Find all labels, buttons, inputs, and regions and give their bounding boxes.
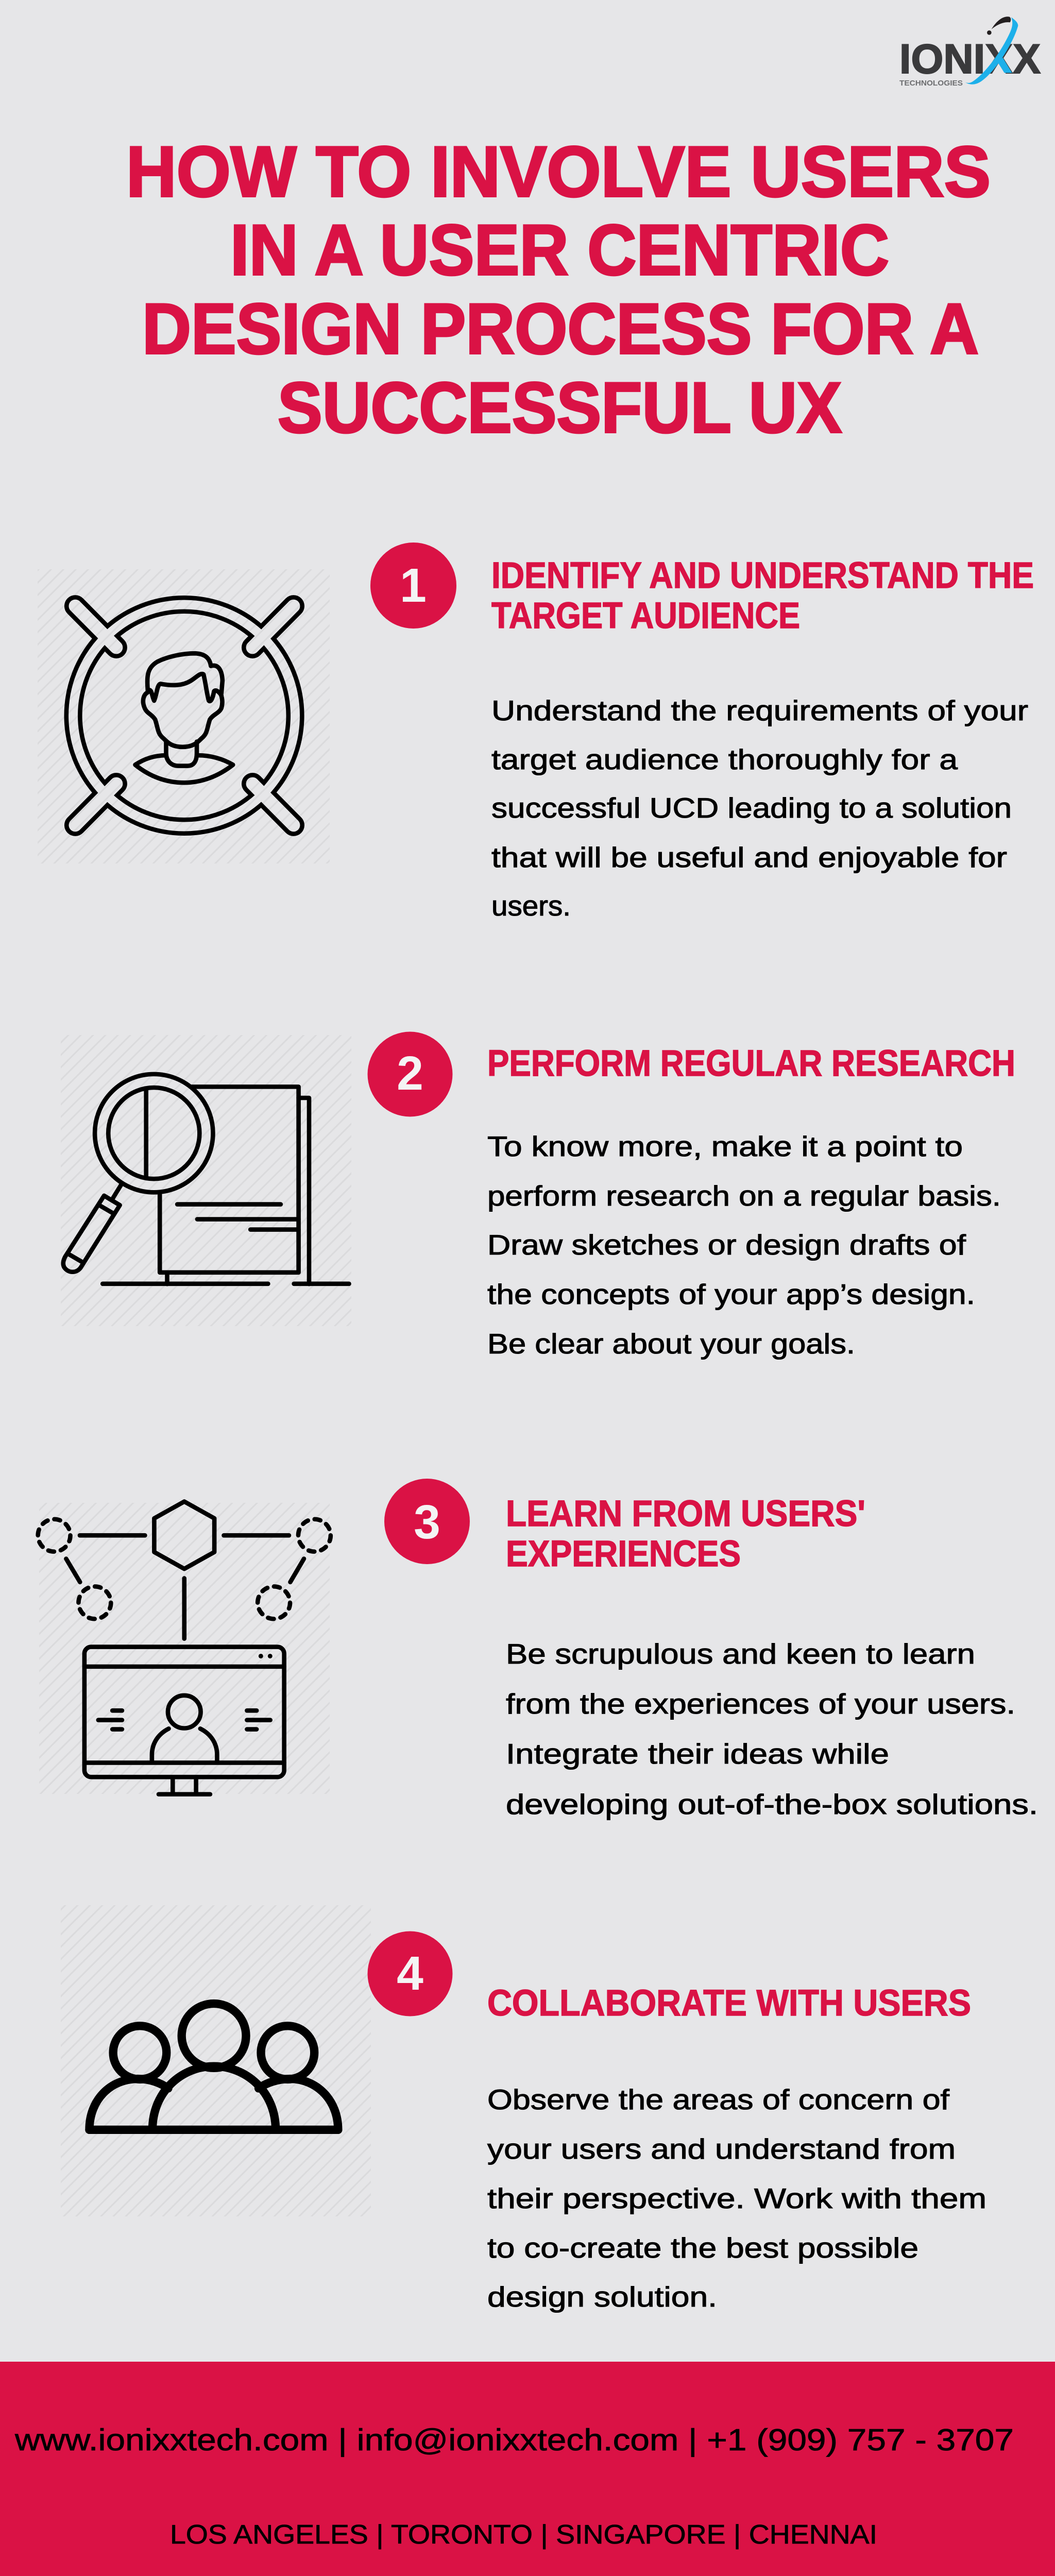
icon: target audience person in crosshair [38, 569, 330, 863]
title: IN A USER CENTRIC [230, 210, 889, 290]
number badge 4: 4 [397, 1946, 423, 2000]
text block: step 1: Understand the requirements of your [491, 694, 1028, 726]
text block: step 4: their perspective. Work with them [487, 2182, 986, 2214]
text block: step 3 [506, 1638, 1038, 1820]
number badge 1 [370, 543, 456, 629]
panel: step 4 [61, 1905, 986, 2313]
logo: Ionixx Technologies: TECHNOLOGIES [899, 79, 963, 88]
logo: Ionixx Technologies: IONIXX [899, 36, 1041, 82]
heading: step 3: LEARN FROM USERS' [506, 1494, 865, 1534]
heading: step 1: TARGET AUDIENCE [491, 596, 800, 636]
text block: step 2: Be clear about your goals. [487, 1328, 855, 1360]
number badge 1: 1 [400, 558, 427, 612]
text block: step 2 [487, 1130, 1001, 1360]
text block: step 1: users. [491, 890, 571, 922]
heading: step 3 [506, 1494, 865, 1574]
text block: step 3: developing out-of-the-box solutions. [506, 1788, 1038, 1820]
text block: step 4: your users and understand from [487, 2133, 956, 2165]
text block: step 1 [491, 694, 1028, 922]
text block: step 1: that will be useful and enjoyable for [491, 841, 1007, 873]
text block: step 4: Observe the areas of concern of [487, 2083, 950, 2115]
logo: Ionixx Technologies [899, 16, 1041, 88]
text block: step 3: Be scrupulous and keen to learn [506, 1638, 975, 1670]
office locations: LOS ANGELES | TORONTO | SINGAPORE | CHENNAI [170, 2520, 877, 2550]
text block: step 2: To know more, make it a point to [487, 1130, 963, 1162]
number badge 2 [368, 1031, 452, 1117]
text block: step 1: successful UCD leading to a solution [491, 792, 1012, 824]
title [126, 132, 991, 448]
text block: step 3: Integrate their ideas while [506, 1738, 889, 1770]
number badge 3 [384, 1479, 470, 1564]
heading: step 4: COLLABORATE WITH USERS [487, 1983, 971, 2024]
number badge 4 [368, 1931, 452, 2016]
icon: group of three users [61, 1905, 371, 2216]
heading: step 3: EXPERIENCES [506, 1534, 741, 1574]
text block: step 4: design solution. [487, 2281, 717, 2313]
text block: step 2: Draw sketches or design drafts of [487, 1229, 966, 1261]
text block: step 1: target audience thoroughly for a [491, 743, 958, 775]
contact line: www.ionixxtech.com | info@ionixxtech.com | +1 (909) 757 - 3707 [14, 2423, 1014, 2457]
text block: step 4: to co-create the best possible [487, 2232, 918, 2264]
icon: magnifier over document [61, 1035, 351, 1326]
icon: network nodes above monitor with user [38, 1501, 331, 1794]
text block: step 3: from the experiences of your users. [506, 1688, 1015, 1720]
panel: step 2 [61, 1031, 1015, 1360]
number badge 3: 3 [414, 1495, 440, 1549]
number badge 2: 2 [397, 1046, 423, 1100]
footer panel [0, 2362, 1055, 2576]
title: DESIGN PROCESS FOR A [142, 289, 979, 369]
text block: step 2: the concepts of your app’s design. [487, 1278, 975, 1310]
heading: step 1 [491, 555, 1034, 636]
panel: step 1 [38, 543, 1034, 922]
text block: step 2: perform research on a regular basis. [487, 1180, 1001, 1212]
text block: step 4 [487, 2083, 986, 2313]
panel: step 3 [38, 1479, 1038, 1820]
title: SUCCESSFUL UX [278, 368, 842, 448]
title: HOW TO INVOLVE USERS [126, 132, 991, 212]
